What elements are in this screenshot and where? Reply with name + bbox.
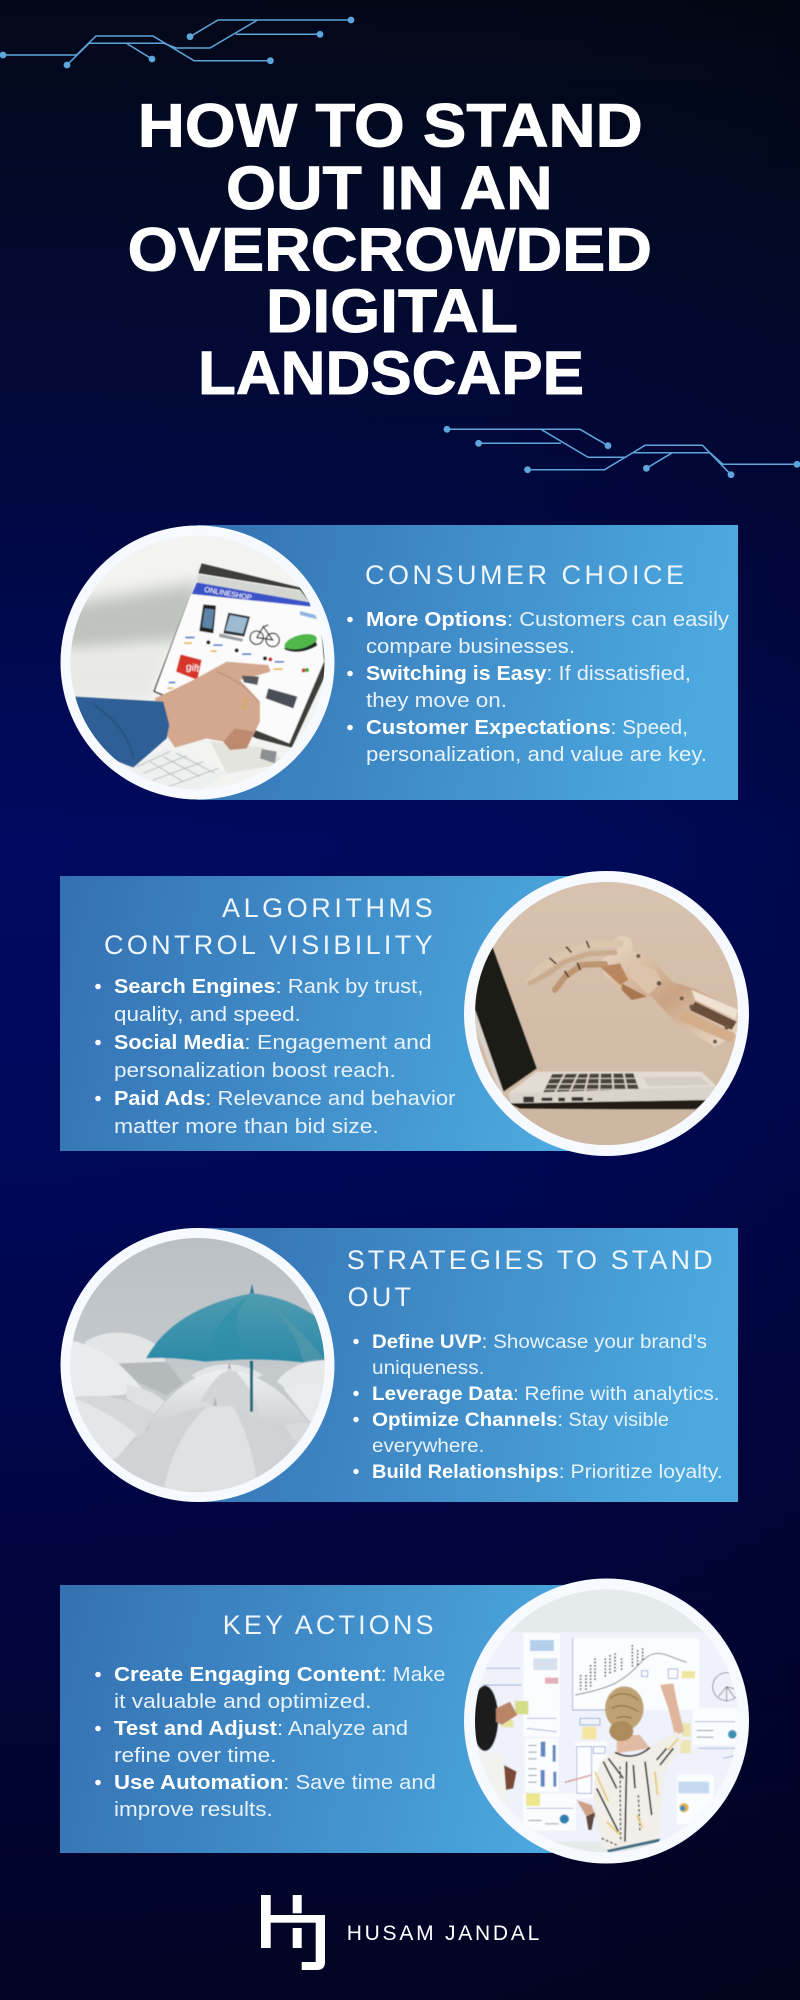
heading: CONTROL VISIBILITY (104, 930, 433, 960)
title: OUT IN AN (226, 154, 553, 222)
heading: STRATEGIES TO STAND (347, 1245, 713, 1275)
bullet list: : Make (381, 1664, 445, 1686)
bullet list: Social Media (114, 1032, 245, 1054)
bullet list: : Refine with analytics. (513, 1384, 720, 1405)
bullet list (347, 609, 729, 766)
photo: hand touching online shop screen (60, 525, 340, 805)
bullet list (95, 976, 456, 1138)
bullet list: Optimize Channels (372, 1410, 557, 1431)
bullet list: Paid Ads (114, 1088, 205, 1110)
heading (104, 893, 433, 960)
bullet list: personalization boost reach. (114, 1060, 396, 1082)
bullet list: Create Engaging Content (114, 1664, 381, 1686)
bullet list: Define UVP (372, 1332, 482, 1353)
bullet list: everywhere. (372, 1436, 484, 1457)
bullet list: More Options (366, 609, 507, 631)
photo: robotic hand over laptop (464, 870, 750, 1156)
panel: strategies to stand out (60, 1225, 738, 1512)
bullet list: matter more than bid size. (114, 1116, 379, 1138)
panel: key actions (60, 1575, 755, 1870)
bullet list: : Stay visible (557, 1410, 669, 1431)
heading (347, 1245, 713, 1312)
bullet list: Customer Expectations (366, 717, 611, 739)
panel: algorithms control visibility (60, 870, 750, 1156)
heading: CONSUMER CHOICE (365, 560, 684, 590)
bullet list: : Analyze and (277, 1718, 408, 1740)
bullet list: Search Engines (114, 976, 276, 998)
bullet list: Leverage Data (372, 1384, 513, 1405)
photo: women working at a wall of charts (460, 1575, 755, 1870)
bullet list: : Relevance and behavior (205, 1088, 456, 1110)
bullet list (353, 1332, 723, 1483)
title: DIGITAL (266, 277, 518, 345)
bullet list: Build Relationships (372, 1462, 559, 1483)
photo: teal umbrella among white umbrellas (60, 1225, 340, 1512)
bullet list (95, 1664, 445, 1821)
bullet list: : Rank by trust, (276, 976, 423, 998)
bullet list: they move on. (366, 690, 507, 712)
bullet list: refine over time. (114, 1745, 276, 1767)
logo: Husam Jandal (261, 1895, 539, 1970)
panel background (197, 525, 738, 800)
bullet list: Use Automation (114, 1772, 283, 1794)
bullet list: uniqueness. (372, 1358, 484, 1379)
title: OVERCROWDED (128, 216, 652, 284)
bullet list: : Prioritize loyalty. (559, 1462, 723, 1483)
photo: hand touching online shop screen: ONLINESHOP (204, 585, 253, 602)
heading: ALGORITHMS (222, 893, 433, 923)
bullet list: quality, and speed. (114, 1004, 301, 1026)
heading: KEY ACTIONS (223, 1610, 434, 1640)
bullet list: : Showcase your brand's (482, 1332, 707, 1353)
bullet list: Test and Adjust (114, 1718, 277, 1740)
circuit decoration: top left (0, 17, 354, 68)
bullet list: : Engagement and (244, 1032, 432, 1054)
title: LANDSCAPE (198, 339, 584, 407)
bullet list: : Speed, (611, 717, 688, 739)
bullet list: Switching is Easy (366, 663, 547, 685)
panel: consumer choice (60, 525, 738, 805)
title (128, 92, 652, 407)
bullet list: personalization, and value are key. (366, 744, 707, 766)
bullet list: : If dissatisfied, (546, 663, 691, 685)
brand name: HUSAM JANDAL (347, 1922, 539, 1945)
bullet list: : Customers can easily (507, 609, 729, 631)
title: HOW TO STAND (138, 92, 643, 160)
icon: HJ monogram (261, 1895, 325, 1970)
panel background (60, 876, 607, 1151)
photo: hand touching online shop screen: gift (185, 662, 200, 675)
bullet list: : Save time and (283, 1772, 436, 1794)
panel background (60, 1585, 607, 1853)
bullet list: it valuable and optimized. (114, 1691, 372, 1713)
circuit decoration: below title (444, 426, 800, 478)
panel background (197, 1228, 738, 1502)
heading: OUT (348, 1282, 411, 1312)
bullet list: improve results. (114, 1799, 273, 1821)
bullet list: compare businesses. (366, 636, 575, 658)
